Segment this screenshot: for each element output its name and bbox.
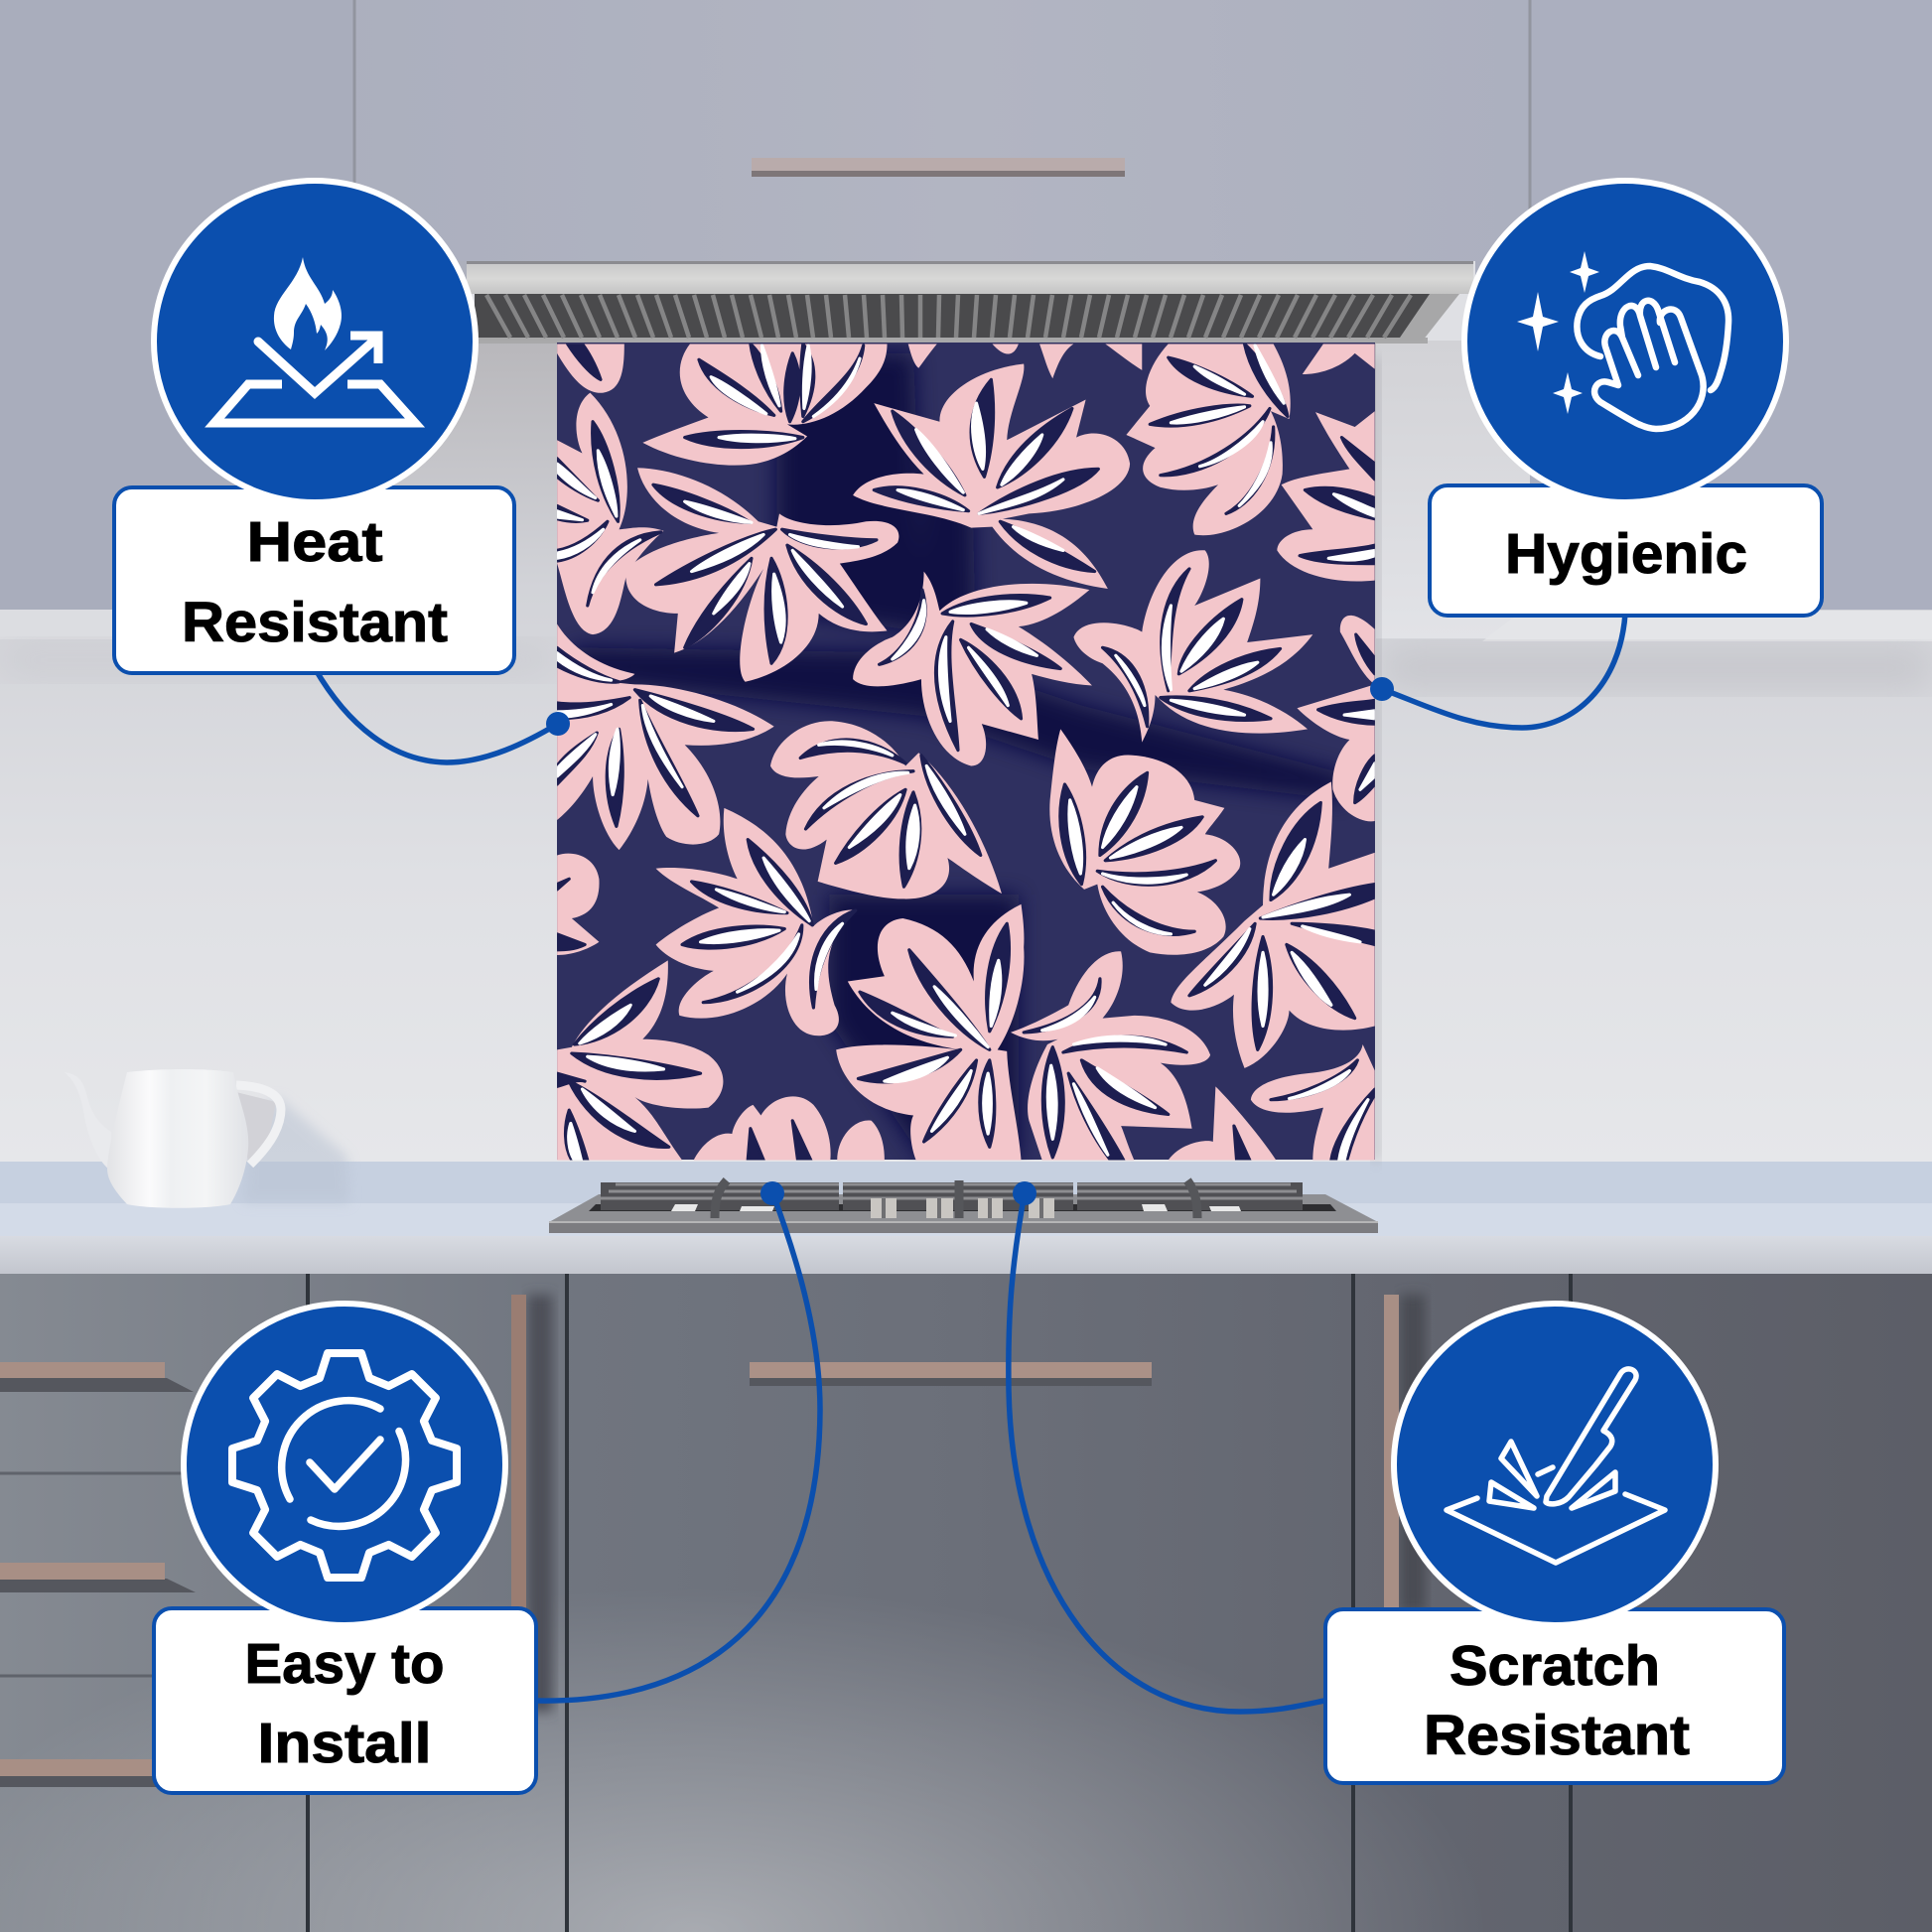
icon badge [154,181,476,502]
label box [1325,1609,1784,1783]
icon badge [1464,181,1786,502]
icon: knife scratching surface [1447,1369,1665,1563]
flower F [625,468,898,682]
connector: easy to install [537,1181,820,1701]
label box [1430,485,1822,616]
flower P [836,904,1025,1161]
flower B [853,363,1130,589]
heading: hygienic: Hygienic [1505,522,1747,586]
flower I [853,572,1092,765]
flower C [1126,344,1291,535]
connector: hygienic [1370,614,1625,728]
heading: install: Install [258,1712,431,1775]
connector: heat resistant [315,668,570,762]
flower E [557,344,664,634]
flower Q [1011,951,1210,1161]
heading: scratch: Scratch [1449,1634,1660,1698]
top edge fragments [908,344,1375,378]
flower N [656,808,856,1035]
hob [549,1180,1378,1233]
callout: hygienic [1430,181,1822,616]
heading: resistant: Resistant [182,591,448,654]
icon badge [1394,1304,1716,1625]
icon: gear with check [232,1353,457,1578]
heading: resistant: Resistant [1424,1704,1690,1767]
flower K [1297,616,1375,821]
icon: flame on surface [214,257,415,423]
left edge fragment [557,854,600,955]
heading: easy to: Easy to [244,1632,445,1696]
panel: floral splashback [557,343,1380,1162]
callout: scratch resistant [1325,1304,1784,1783]
icon: wiping hand with sparkles [1517,251,1728,429]
flower L [1049,729,1240,955]
callout: easy to install [154,1304,536,1793]
flower M [1171,781,1375,1068]
bottom edge fragments [694,1044,1375,1161]
flower G [557,624,774,850]
flower J [1073,550,1312,743]
icon badge [184,1304,505,1625]
flower O [557,960,723,1161]
connector: scratch resistant [1009,1181,1324,1712]
flower A [642,344,888,466]
white pitcher [65,1069,349,1208]
flower H [770,721,1002,898]
heading: heat: Heat [246,510,383,574]
panel reflections [572,353,1344,1161]
callout: heat resistant [114,181,514,673]
label box [154,1608,536,1793]
flower D [1277,411,1375,581]
label box [114,487,514,673]
